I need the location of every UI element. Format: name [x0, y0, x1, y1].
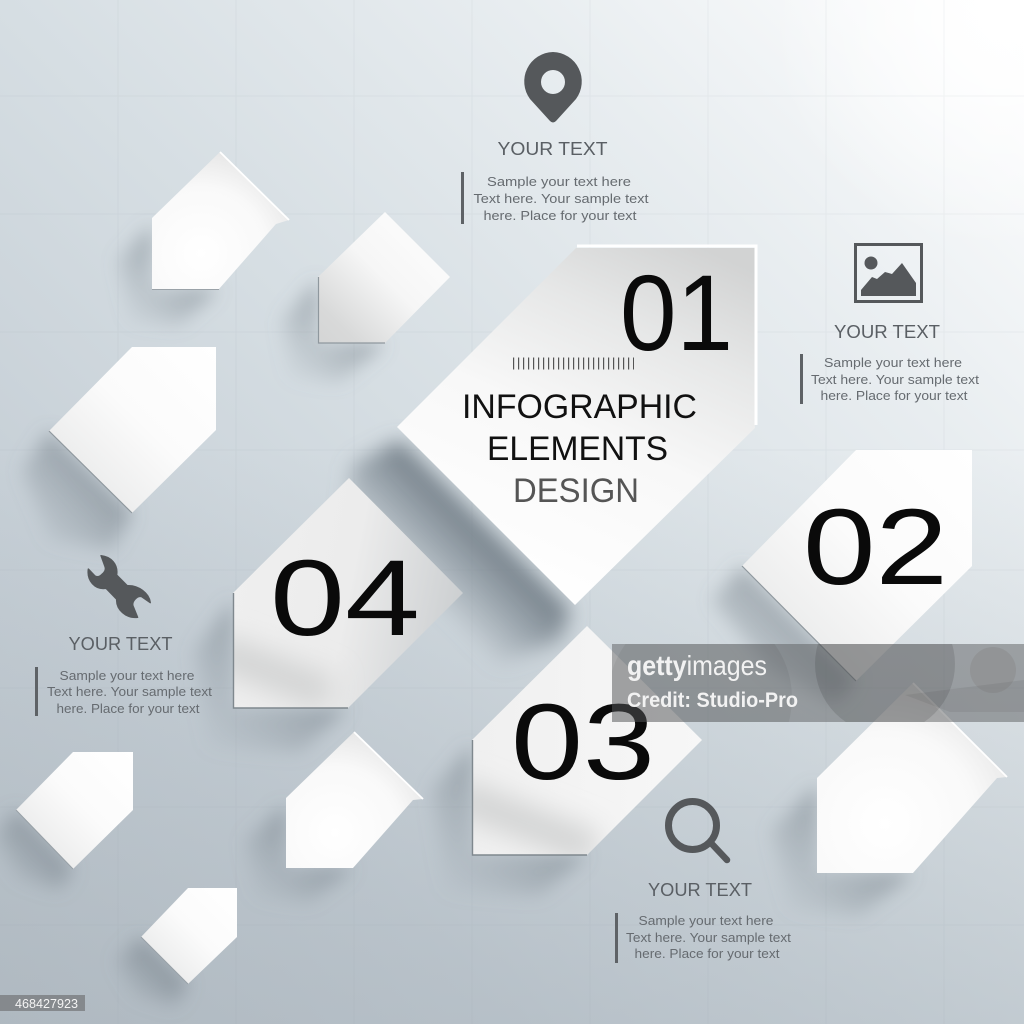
accent bar [461, 172, 464, 224]
heading: YOUR TEXT [648, 879, 752, 900]
image id tag [0, 995, 85, 1011]
body: here. Place for your text [634, 946, 780, 961]
title: DESIGN [513, 472, 639, 510]
body: here. Place for your text [820, 388, 968, 403]
watermark band [612, 644, 1024, 722]
body: here. Place for your text [484, 208, 637, 223]
body [626, 913, 791, 961]
heading: YOUR TEXT [834, 321, 940, 342]
icon: map pin [524, 52, 582, 122]
body [811, 355, 979, 403]
number 04: 04 [270, 537, 420, 658]
panel: small arrow top left [152, 152, 289, 290]
panel: small arrow left [49, 347, 216, 513]
panel: small arrow bottom middle [286, 732, 423, 868]
icon: wrench [88, 556, 150, 617]
panel: 03 card [455, 626, 702, 855]
image id tag: 468427923 [15, 997, 78, 1011]
body [474, 174, 649, 223]
text block: top [461, 138, 649, 224]
panel: 04 card [215, 478, 463, 708]
panel: 01 main card [397, 246, 756, 605]
body: Sample your text here [60, 668, 194, 683]
body: Sample your text here [487, 174, 631, 189]
panel: arrow bottom right [817, 683, 1007, 873]
text block: left [35, 633, 212, 716]
text block: bottom [615, 879, 791, 963]
panel: 02 card [742, 450, 972, 681]
body [47, 668, 212, 716]
title: INFOGRAPHIC [462, 388, 697, 426]
heading: YOUR TEXT [68, 633, 172, 654]
panel: small arrow top middle [318, 212, 450, 343]
body: Text here. Your sample text [474, 191, 649, 206]
accent bar [35, 667, 38, 716]
title: ELEMENTS [487, 430, 668, 468]
card shadows [0, 225, 913, 1006]
body: here. Place for your text [56, 701, 200, 716]
heading: YOUR TEXT [498, 138, 608, 159]
panel: tiny arrow bottom [141, 888, 237, 984]
number 02: 02 [803, 486, 948, 607]
body: Text here. Your sample text [626, 930, 791, 945]
panel: small arrow bottom left [16, 752, 133, 869]
body: Text here. Your sample text [811, 372, 979, 387]
body: Text here. Your sample text [47, 684, 212, 699]
main card shadow [345, 440, 570, 665]
title [462, 388, 697, 510]
body: Sample your text here [824, 355, 962, 370]
text block: right [800, 321, 979, 404]
body: Sample your text here [638, 913, 774, 928]
accent bar [800, 354, 803, 404]
tick ruler [513, 358, 634, 370]
credit text: Credit: Studio-Pro [627, 689, 798, 712]
icon: magnifier [668, 802, 727, 860]
number 03: 03 [511, 681, 655, 802]
icon: picture [856, 244, 922, 302]
accent bar [615, 913, 618, 963]
number 01: 01 [620, 252, 733, 373]
logo text: gettyimages [627, 650, 767, 681]
